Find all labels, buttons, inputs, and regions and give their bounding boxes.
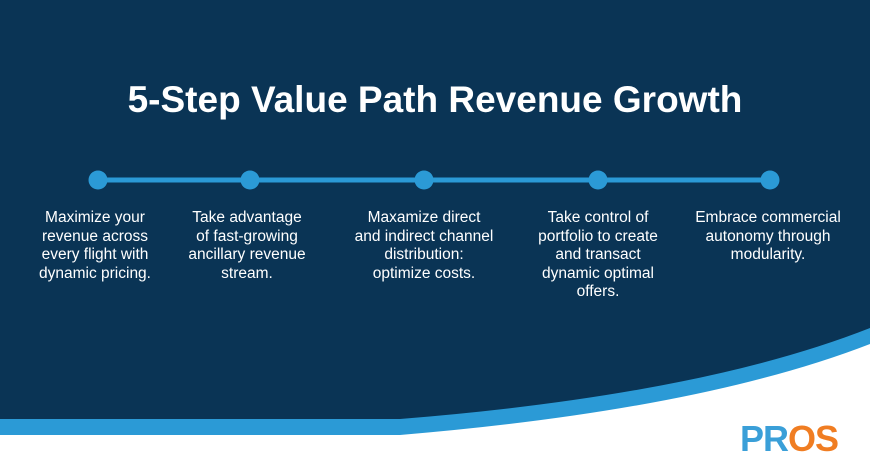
step 5 text: Embrace commercial (695, 209, 841, 226)
logo: PROS (740, 418, 838, 459)
step 1 text (39, 209, 151, 282)
step 3 text (355, 209, 493, 282)
step 2 text: ancillary revenue (188, 246, 306, 263)
step 4 text: portfolio to create (538, 228, 658, 244)
step 4 text (538, 209, 658, 300)
step 3 text: optimize costs. (373, 264, 475, 282)
step 5 text (695, 209, 841, 263)
step 4 text: offers. (577, 283, 619, 300)
step 5 text: autonomy through (706, 228, 830, 244)
step 3 text: distribution: (384, 246, 464, 263)
step 4 text: Take control of (548, 209, 648, 226)
step 2 text: stream. (221, 264, 273, 282)
step 4 text: dynamic optimal (542, 264, 654, 282)
step 2 text: Take advantage (192, 209, 302, 226)
step 3 text: and indirect channel (355, 228, 493, 244)
step 4 text: and transact (555, 246, 641, 263)
timeline (88, 170, 780, 190)
step 5 text: modularity. (731, 246, 805, 263)
step 3 text: Maxamize direct (368, 209, 480, 226)
step 2 text (188, 209, 306, 282)
step 1 text: Maximize your (45, 209, 145, 226)
step 2 text: of fast-growing (196, 228, 298, 244)
title: 5-Step Value Path Revenue Growth (128, 79, 742, 120)
step 1 text: revenue across (42, 228, 148, 244)
step 1 text: dynamic pricing. (39, 264, 151, 282)
step 1 text: every flight with (42, 246, 148, 263)
